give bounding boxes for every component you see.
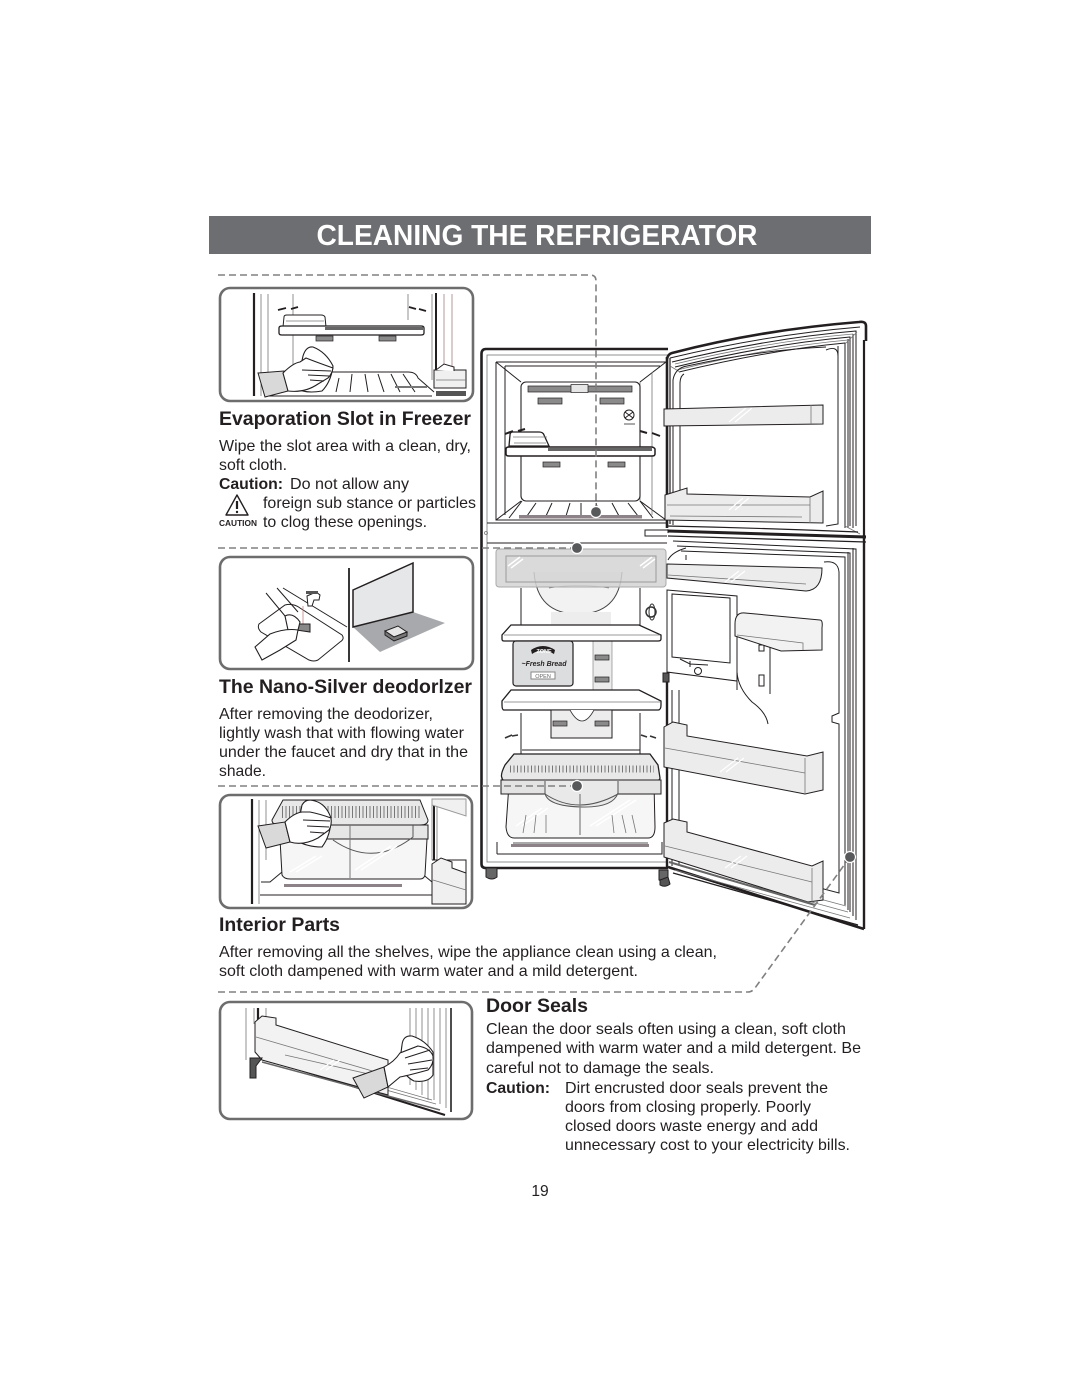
text: door seals: Caution: bbox=[486, 1080, 550, 1097]
page number: 19 bbox=[531, 1183, 549, 1200]
text: deodorizer bbox=[219, 706, 468, 780]
small bin bbox=[735, 613, 822, 651]
text: evaporation slot: soft cloth. bbox=[219, 457, 287, 474]
text: evaporation slot: to clog these openings. bbox=[263, 514, 427, 531]
panel: interior parts illustration bbox=[220, 795, 472, 908]
fresh bread box: ~Fresh Bread bbox=[522, 661, 567, 668]
text: interior parts bbox=[219, 944, 717, 980]
crisper bin bbox=[501, 754, 661, 838]
text: deodorizer: under the faucet and dry that in the bbox=[219, 744, 468, 761]
text: door seals: careful not to damage the seals. bbox=[486, 1060, 714, 1077]
icon: caution triangle: CAUTION bbox=[219, 518, 257, 528]
dispenser panel bbox=[667, 590, 737, 681]
heading: evaporation slot: Evaporation Slot in Freezer bbox=[219, 408, 471, 430]
dashed leader lines bbox=[218, 275, 850, 992]
title banner: CLEANING THE REFRIGERATOR bbox=[316, 220, 758, 252]
fresh food compartment bbox=[496, 549, 666, 854]
title banner bbox=[209, 216, 871, 254]
fridge cabinet bbox=[482, 349, 668, 882]
heading: door seals: Door Seals bbox=[486, 995, 588, 1017]
panel: deodorizer illustration bbox=[220, 557, 473, 669]
shelf lower bbox=[502, 690, 661, 710]
text: evaporation slot: Caution: bbox=[219, 476, 283, 493]
icon: hands under faucet bbox=[255, 588, 347, 661]
refrigerator illustration bbox=[482, 322, 866, 929]
text: door seals: dampened with warm water and a mild detergent. Be bbox=[486, 1040, 861, 1057]
text: evaporation slot: foreign sub stance or particles bbox=[263, 495, 476, 512]
door bin bottom bbox=[664, 819, 823, 902]
fresh bread box: ZONE bbox=[536, 649, 552, 655]
text: door seals: Clean the door seals often using a clean, soft cloth bbox=[486, 1021, 846, 1038]
freezer door bbox=[664, 322, 866, 536]
freezer compartment bbox=[505, 382, 660, 518]
door shelf top with guard bbox=[667, 564, 822, 591]
icon: gloved hand with cloth bbox=[258, 800, 331, 848]
fridge door bbox=[660, 531, 866, 929]
freezer door shelf bottom bbox=[665, 488, 823, 523]
fresh bread box: OPEN bbox=[535, 674, 551, 680]
panel: door seals illustration bbox=[220, 1002, 472, 1119]
door bin middle bbox=[664, 722, 823, 794]
text: deodorizer: lightly wash that with flowing water bbox=[219, 725, 464, 742]
text: door seals: doors from closing properly. Poorly bbox=[565, 1099, 811, 1116]
icon: shade panel with deodorizer bbox=[353, 563, 445, 652]
heading: interior parts: Interior Parts bbox=[219, 914, 340, 936]
text: door seals: unnecessary cost to your electricity bills. bbox=[565, 1137, 850, 1154]
text: evaporation slot: Wipe the slot area with a clean, dry, bbox=[219, 438, 471, 455]
text: door seals: Dirt encrusted door seals prevent the bbox=[565, 1080, 828, 1097]
text: deodorizer: shade. bbox=[219, 763, 266, 780]
shelf upper bbox=[502, 625, 661, 641]
text: interior parts: After removing all the shelves, wipe the appliance clean using a clean, bbox=[219, 944, 717, 961]
text: evaporation slot: Do not allow any bbox=[290, 476, 409, 493]
text: interior parts: soft cloth dampened with warm water and a mild detergent. bbox=[219, 963, 638, 980]
heading: nano-silver deodorizer: The Nano-Silver deodorlzer bbox=[219, 676, 472, 698]
text: door seals bbox=[486, 1021, 861, 1154]
icon: gloved hand with cloth bbox=[353, 1036, 433, 1098]
text: evaporation slot bbox=[219, 438, 476, 531]
panel: evaporation slot illustration bbox=[220, 288, 473, 401]
icon: gloved hand with cloth bbox=[258, 347, 333, 397]
fresh bread box bbox=[513, 641, 573, 686]
icon: caution triangle bbox=[219, 495, 257, 528]
text: deodorizer: After removing the deodorizer, bbox=[219, 706, 433, 723]
callout dots bbox=[572, 506, 856, 862]
freezer door shelf top bbox=[664, 405, 823, 426]
text: door seals: closed doors waste energy and add bbox=[565, 1118, 818, 1135]
